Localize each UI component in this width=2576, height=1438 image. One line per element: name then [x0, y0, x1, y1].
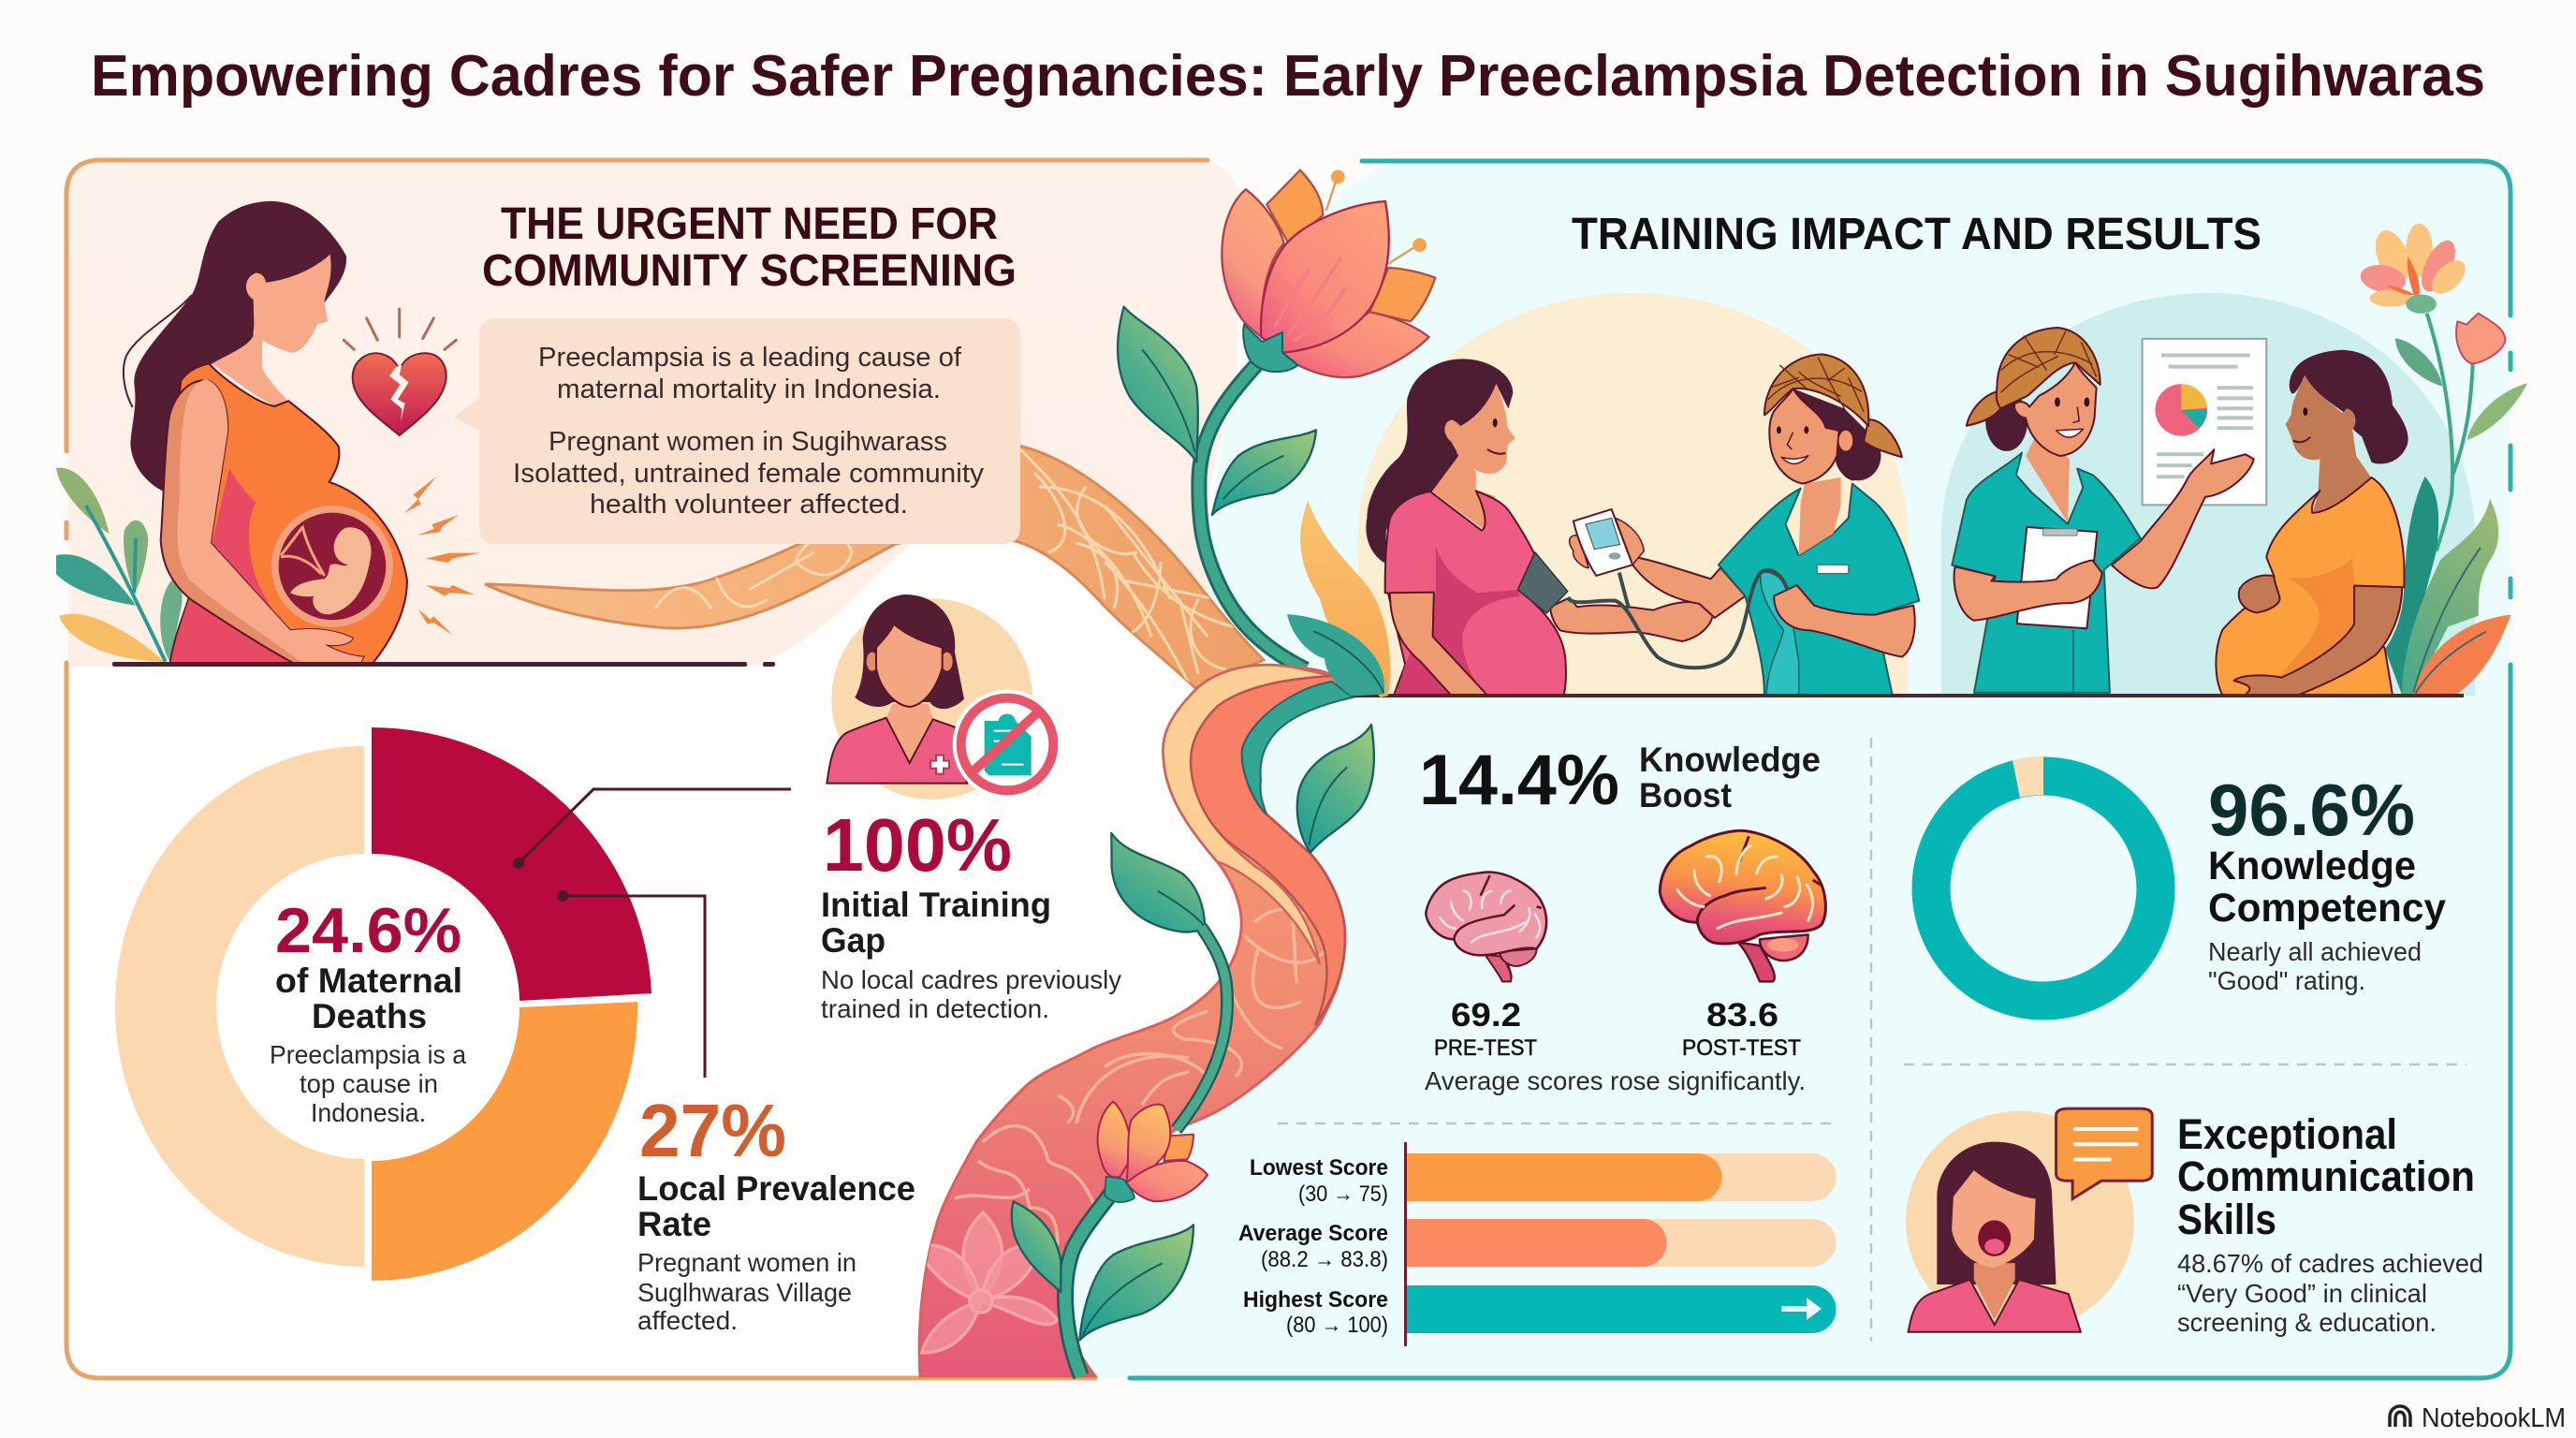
stat: 14.4% knowledge boost: 14.4%: [1419, 741, 1619, 820]
stat: communication skills: screening & education.: [2177, 1308, 2437, 1337]
hair: [130, 201, 346, 492]
pain sparks: [404, 477, 480, 635]
icon: untrained cadre with no-clipboard sign: [827, 594, 1061, 800]
pre and post test scores: POST-TEST: [1682, 1035, 1801, 1061]
speech bubble: [2056, 1108, 2152, 1199]
stat: communication skills: “Very Good” in clinical: [2177, 1279, 2427, 1308]
heading: training impact: TRAINING IMPACT AND RESULTS: [1572, 210, 2261, 259]
icon: speaking cadre with speech bubble: [1906, 1108, 2152, 1332]
stat: 96.6% knowledge competency: "Good" rating.: [2208, 966, 2365, 995]
stat: 96.6% knowledge competency: Knowledge: [2208, 844, 2416, 888]
arm highlight: [177, 379, 363, 663]
stat: 27% prevalence: 27%: [639, 1089, 786, 1172]
stat: 14.4% knowledge boost: Knowledge: [1639, 741, 1821, 779]
stat: 96.6% knowledge competency: Nearly all achieved: [2208, 937, 2422, 966]
illustration: cadre educating pregnant woman with poster: [1952, 223, 2527, 695]
bar labels: Lowest Score: [1250, 1155, 1388, 1181]
donut chart: knowledge competency: [1931, 756, 2156, 1001]
decorative ribbon: orange batik: [485, 445, 1264, 688]
stat: 24.6% maternal deaths: Deaths: [312, 997, 427, 1035]
stat: communication skills: Exceptional: [2177, 1110, 2397, 1158]
fetus circle: [271, 506, 393, 627]
stat: 14.4% knowledge boost: Boost: [1639, 776, 1732, 814]
stamens: [1326, 178, 1418, 264]
stat: communication skills: Skills: [2177, 1196, 2276, 1243]
icon: post-test brain: [1660, 830, 1825, 981]
left leaf: [1111, 833, 1205, 932]
illustration: pregnant woman with fetus, heart and leaves: [56, 201, 480, 663]
right foliage: [2357, 223, 2527, 695]
pre and post test scores: [1425, 997, 1806, 1095]
stat: 27% prevalence: [637, 1089, 915, 1335]
pre and post test scores: 83.6: [1706, 997, 1778, 1034]
upper flower and leaves: [1118, 170, 1435, 515]
callout box: preeclampsia context: Preeclampsia is a leading cause of: [538, 343, 962, 373]
stat: communication skills: [2177, 1110, 2483, 1337]
heading: urgent need: THE URGENT NEED FOR: [501, 199, 998, 249]
bar labels: [1238, 1155, 1388, 1338]
donut chart: maternal deaths: [115, 727, 791, 1281]
stat: 24.6% maternal deaths: of Maternal: [275, 961, 462, 1000]
bar chart: score ranges: [1238, 1142, 1837, 1346]
heading: urgent need: COMMUNITY SCREENING: [482, 246, 1017, 296]
bar labels: (88.2 → 83.8): [1261, 1247, 1388, 1272]
panel background: left white lower area: [68, 468, 1229, 1376]
nurse with headscarf: [1632, 354, 1919, 696]
poster: [2143, 339, 2266, 505]
stat: communication skills: Communication: [2177, 1152, 2475, 1200]
scene base line: [1350, 694, 2464, 697]
panel background: urgent need peach area: [68, 162, 1237, 667]
stat: 27% prevalence: affected.: [637, 1306, 738, 1335]
left leaf: [1118, 307, 1198, 462]
stat: 24.6% maternal deaths: Indonesia.: [311, 1098, 426, 1127]
nurse with clipboard: [1952, 328, 2254, 693]
stat: 96.6% knowledge competency: Competency: [2208, 886, 2446, 931]
sepal: [1243, 325, 1298, 372]
highest score bar: [1407, 1285, 1837, 1333]
hair strand: [124, 295, 192, 407]
stat: 27% prevalence: Suglhwaras Village: [637, 1278, 852, 1307]
bar labels: (80 → 100): [1286, 1313, 1388, 1338]
pre and post test scores: 69.2: [1451, 997, 1521, 1034]
dress: [164, 363, 407, 663]
right leaf: [1297, 725, 1374, 853]
stat: 24.6% maternal deaths: Preeclampsia is a: [270, 1040, 466, 1069]
callout box: preeclampsia context: maternal mortality in Indonesia.: [557, 374, 941, 404]
dress shadow: [170, 468, 290, 663]
average score bar: [1407, 1219, 1837, 1267]
stat: communication skills: 48.67% of cadres achieved: [2177, 1249, 2483, 1278]
woman in orange shirt: [2216, 350, 2408, 695]
orange segment: [372, 1002, 637, 1281]
stat: 100% training gap: 100%: [823, 803, 1012, 887]
left foliage: [56, 468, 183, 662]
divider line under woman: [112, 662, 775, 667]
right leaf: [1212, 430, 1316, 515]
panel background: training impact pale blue area: [1048, 162, 2510, 1378]
batik flower motif: [913, 1212, 1058, 1353]
right panel teal border: [1130, 161, 2510, 1378]
title: Empowering Cadres for Safer Pregnancies: Early Preeclampsia Detection in Sugihwaras: [91, 44, 2485, 109]
callout box: preeclampsia context: Isolatted, untrained female community: [513, 459, 985, 489]
backdrop arches behind the scene: [1358, 293, 2475, 696]
pre and post test scores: PRE-TEST: [1434, 1035, 1537, 1061]
broken heart: [344, 309, 456, 435]
lower stem: [1065, 1189, 1114, 1376]
pre and post test scores: Average scores rose significantly.: [1425, 1066, 1806, 1095]
dashed section dividers: [1278, 738, 2466, 1342]
monitor and tube: [1568, 509, 1787, 668]
leaves: [1012, 1201, 1061, 1292]
bar labels: (30 → 75): [1298, 1181, 1388, 1207]
teal leaf of scene: [1287, 614, 1384, 696]
icon: pre-test brain: [1426, 873, 1546, 981]
bar labels: Average Score: [1238, 1221, 1388, 1246]
stat: 100% training gap: [821, 803, 1121, 1023]
side petals: [1222, 189, 1284, 337]
leaves on ribbon with teal accent: [1111, 614, 1384, 932]
peach strand: [1163, 665, 1332, 964]
stat: 100% training gap: Initial Training: [821, 886, 1051, 924]
arm: [161, 380, 363, 663]
stat: 24.6% maternal deaths: 24.6%: [275, 895, 461, 966]
stat: 96.6% knowledge competency: 96.6%: [2208, 769, 2415, 851]
stat: 14.4% knowledge boost: [1419, 741, 1821, 820]
coral strand: [1191, 676, 1345, 1025]
teal strand: [1242, 682, 1353, 814]
leader lines: [519, 789, 791, 1078]
callout box: preeclampsia context: [454, 318, 1020, 544]
crimson segment: [372, 727, 651, 1001]
stem of upper flower: [1199, 365, 1306, 669]
callout box: preeclampsia context: Pregnant women in Sugihwarass: [549, 427, 947, 457]
no sign: [953, 690, 1061, 799]
stat: 24.6% maternal deaths: top cause in: [300, 1069, 438, 1098]
stat: 24.6% maternal deaths: [270, 895, 466, 1127]
ribbon base: [919, 665, 1345, 1376]
bar labels: Highest Score: [1243, 1287, 1388, 1313]
bar axis: [1404, 1142, 1407, 1346]
stat: 27% prevalence: Local Prevalence: [637, 1169, 915, 1208]
stat: 27% prevalence: Pregnant women in: [637, 1248, 856, 1277]
upper stem: [1177, 927, 1227, 1130]
batik pattern: [913, 899, 1329, 1353]
pale segment: [115, 746, 364, 1267]
illustration: flowing batik ribbon: [913, 665, 1353, 1376]
stat: 27% prevalence: Rate: [637, 1205, 711, 1243]
stat: 96.6% knowledge competency: [2208, 769, 2446, 995]
back petals: [1266, 170, 1323, 243]
left panel orange border: [66, 160, 1208, 1378]
petals: [1164, 1135, 1193, 1161]
stat: 100% training gap: Gap: [821, 921, 886, 960]
woman in pink shirt: [1366, 359, 1713, 696]
illustration: cadre measuring blood pressure of pregnant woman: [1366, 354, 1919, 696]
lower flower with stem and leaves: [1012, 927, 1227, 1376]
stat: 100% training gap: trained in detection.: [821, 994, 1049, 1023]
main petal: [1261, 201, 1389, 353]
lowest score bar: [1407, 1153, 1837, 1201]
heading: urgent need: [482, 199, 1017, 296]
stat: 100% training gap: No local cadres previously: [821, 965, 1121, 994]
yellow leaf behind scene: [1300, 501, 1390, 697]
NotebookLM watermark: NotebookLM: [2422, 1403, 2566, 1433]
callout box: preeclampsia context: health volunteer affected.: [590, 490, 908, 520]
face and neck: [212, 255, 331, 407]
